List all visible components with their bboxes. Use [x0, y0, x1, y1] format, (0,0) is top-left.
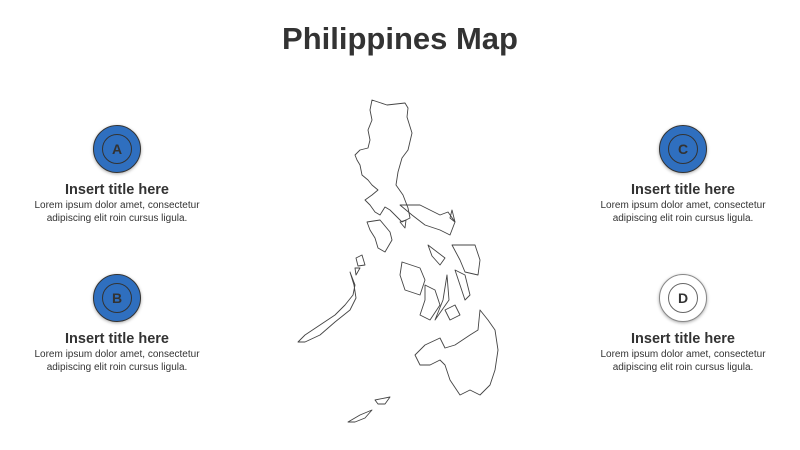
item A: Insert title here [65, 182, 169, 198]
item B: Lorem ipsum dolor amet, consectetur [34, 349, 200, 360]
item D: D [678, 290, 688, 306]
item A: A [112, 141, 122, 157]
title: Philippines Map [282, 21, 518, 56]
item B: Insert title here [65, 331, 169, 347]
item C [600, 124, 766, 224]
item C: Lorem ipsum dolor amet, consectetur [600, 200, 766, 211]
item D: Insert title here [631, 331, 735, 347]
item B: B [112, 290, 122, 306]
item C: C [678, 141, 688, 157]
item A [34, 124, 200, 224]
item A: adipiscing elit roin cursus ligula. [47, 212, 187, 224]
item D: adipiscing elit roin cursus ligula. [613, 362, 753, 372]
item B [34, 273, 200, 372]
item D: Lorem ipsum dolor amet, consectetur [600, 349, 766, 360]
item C: adipiscing elit roin cursus ligula. [613, 212, 753, 224]
item C: Insert title here [631, 182, 735, 198]
item A: Lorem ipsum dolor amet, consectetur [34, 200, 200, 211]
item B: adipiscing elit roin cursus ligula. [47, 362, 187, 372]
item D [600, 273, 766, 372]
